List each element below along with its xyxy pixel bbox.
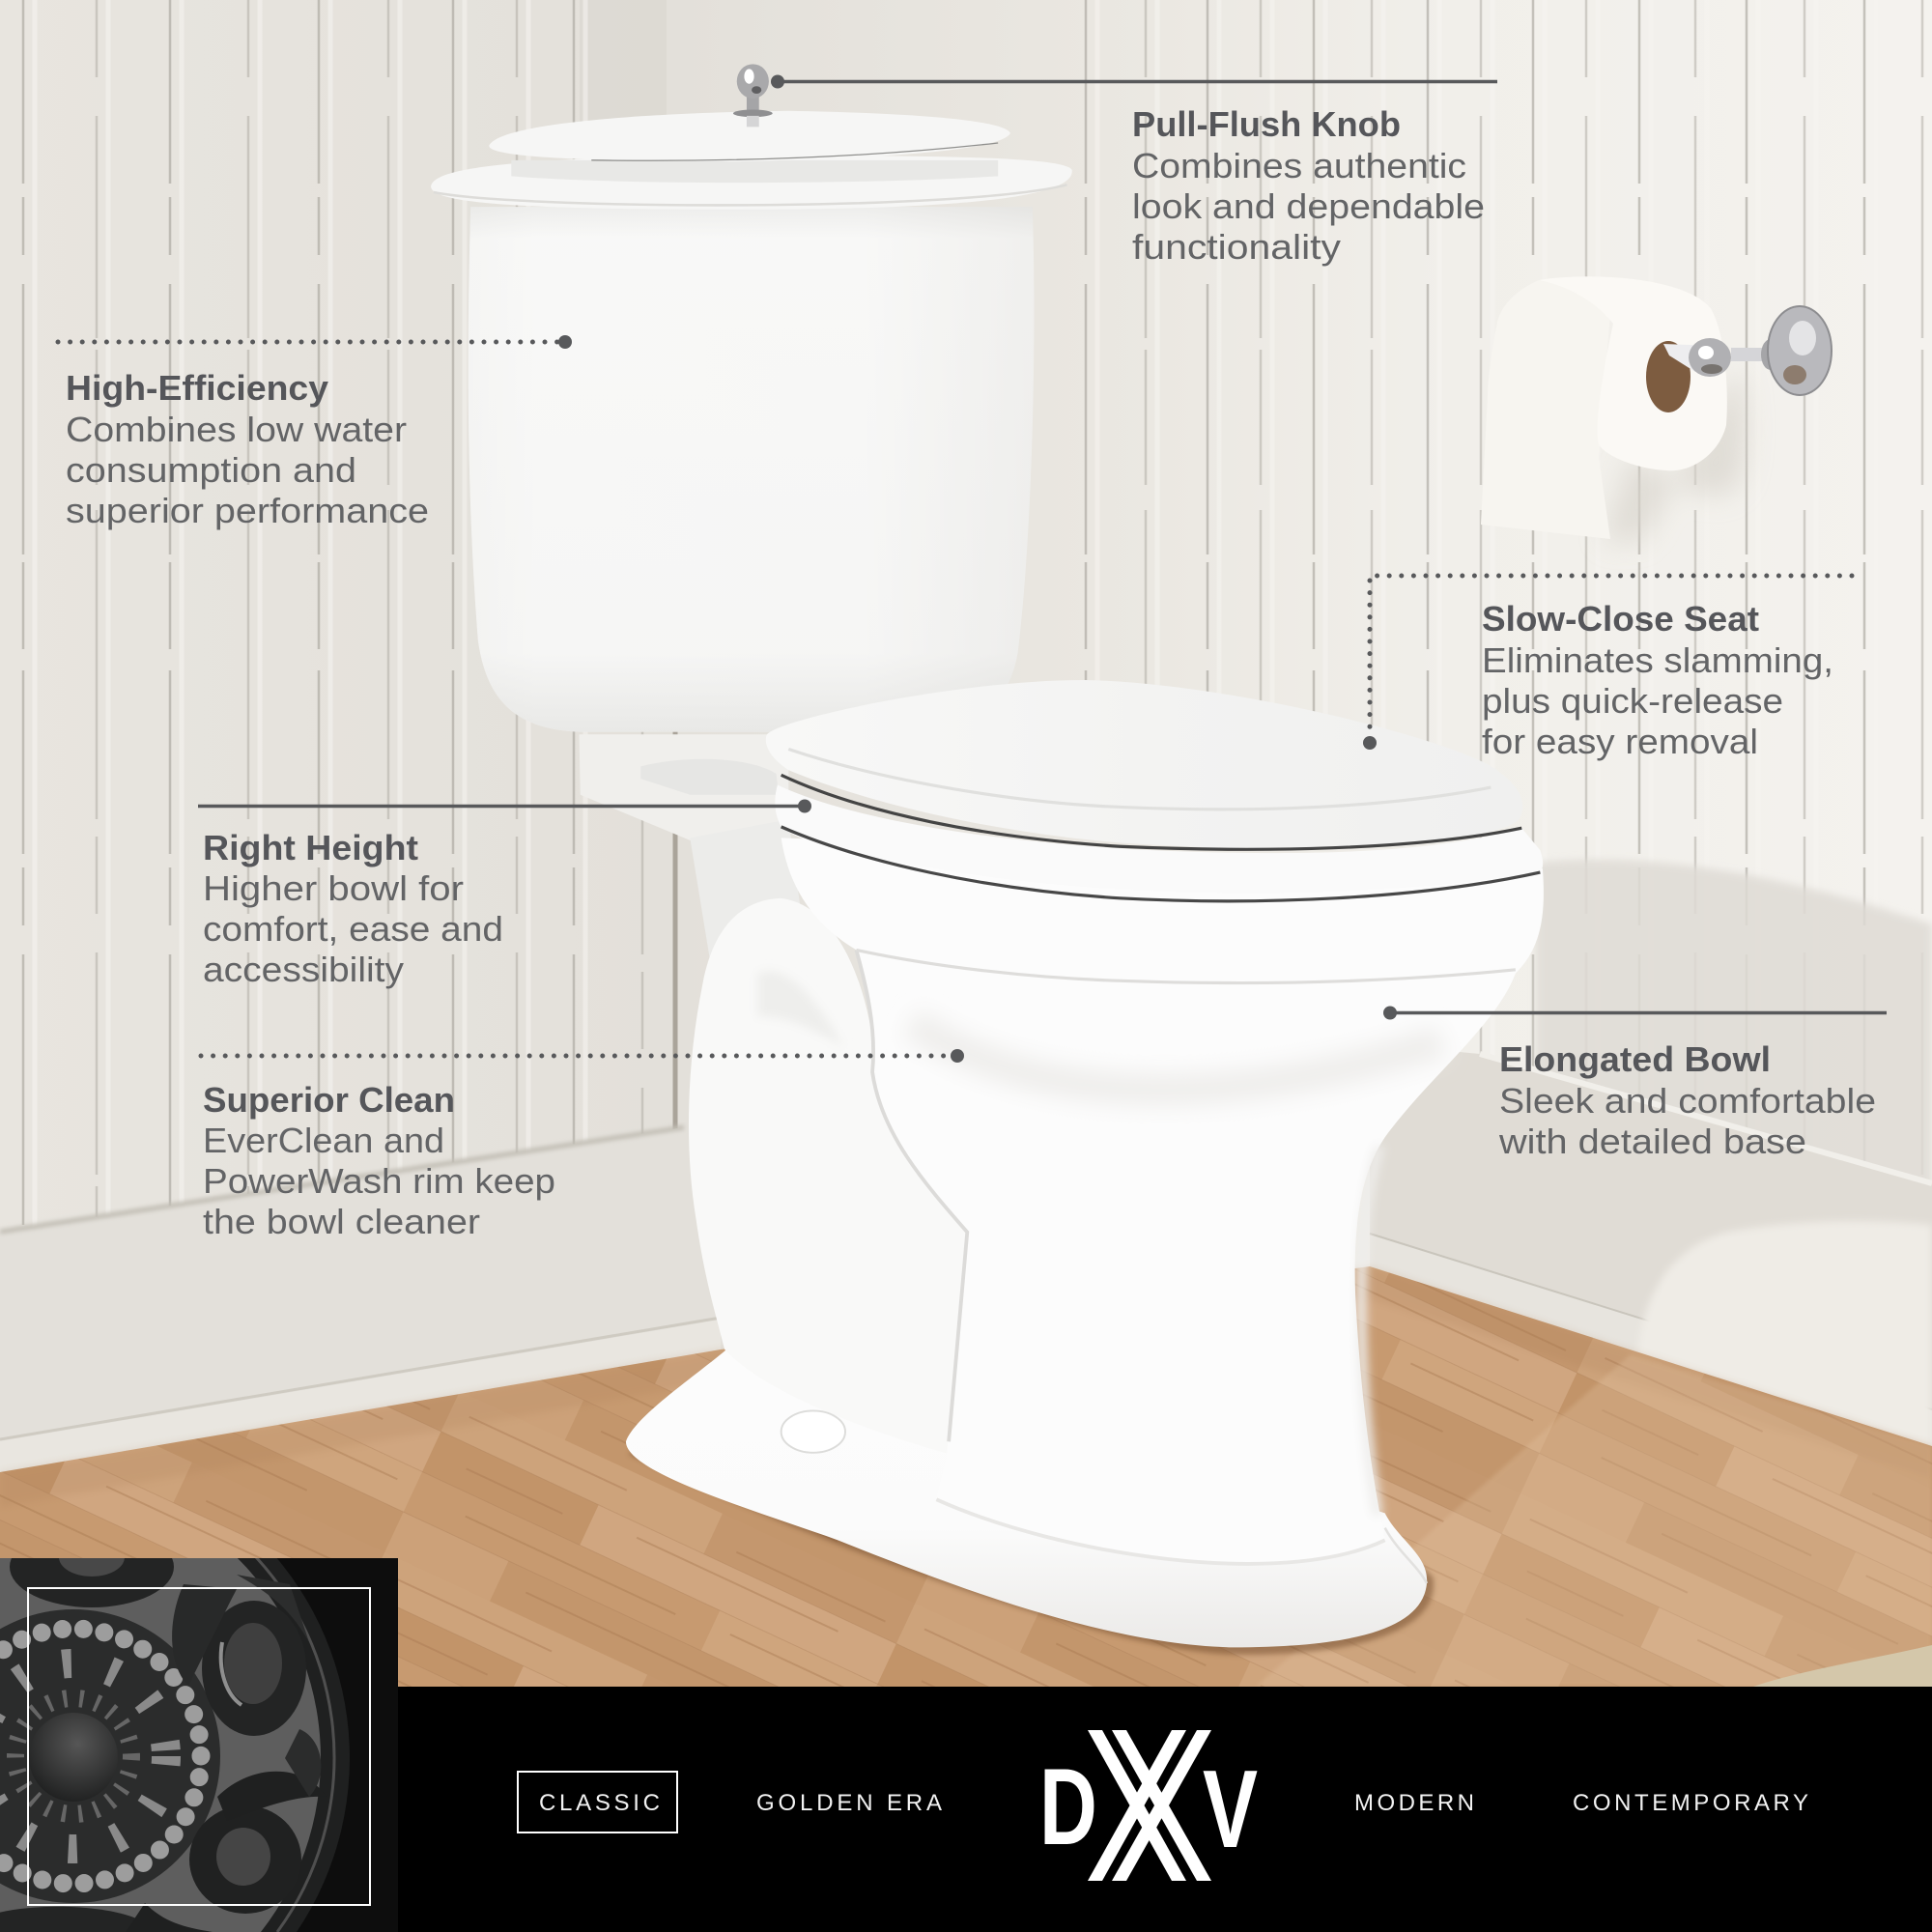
callout: elongated bowl: Sleek and comfortable <box>1499 1081 1876 1121</box>
callout: superior clean: EverClean and <box>203 1121 444 1160</box>
neck <box>579 734 788 840</box>
callout: high-efficiency: superior performance <box>66 491 429 530</box>
callout: superior clean: PowerWash rim keep <box>203 1161 555 1201</box>
roll <box>1539 276 1727 470</box>
callout: right height: Right Height <box>203 828 418 867</box>
style label: classic <box>518 1772 677 1833</box>
pull-flush knob <box>733 64 773 127</box>
callout: superior clean: Superior Clean <box>203 1080 455 1120</box>
bowl base <box>626 1350 1427 1647</box>
footer bar <box>0 1687 1932 1932</box>
callout: slow-close seat: for easy removal <box>1482 722 1758 761</box>
callout: high-efficiency: consumption and <box>66 450 356 490</box>
seat <box>775 784 1543 894</box>
callout: right height: comfort, ease and <box>203 909 503 949</box>
callout: pull-flush knob: Pull-Flush Knob <box>1132 104 1401 144</box>
bowl <box>781 838 1544 1564</box>
beadboard grooves <box>23 0 1922 1256</box>
rug <box>1753 1645 1932 1687</box>
callout: superior clean: the bowl cleaner <box>203 1202 480 1241</box>
callout: high-efficiency <box>58 335 572 530</box>
wall shadow on right <box>1536 860 1932 1256</box>
callout: slow-close seat: Eliminates slamming, <box>1482 640 1833 680</box>
right baseboard <box>1370 1043 1932 1446</box>
tank rim <box>431 156 1072 210</box>
callout: right height: Higher bowl for <box>203 868 464 908</box>
sun patch on baseboard <box>1637 1221 1932 1446</box>
panel: ornamental medallion <box>0 1558 398 1932</box>
tank body <box>469 207 1034 732</box>
left baseboard <box>0 1127 721 1472</box>
bolt cap <box>781 1410 845 1453</box>
callout: elongated bowl: Elongated Bowl <box>1499 1039 1771 1079</box>
roll hole <box>1646 341 1690 412</box>
callout: right height: accessibility <box>203 950 404 989</box>
sunlit floor <box>1256 1354 1932 1687</box>
wall <box>0 0 1932 1507</box>
logo: DXV <box>1039 1730 1258 1881</box>
style label: golden era: GOLDEN ERA <box>756 1790 942 1816</box>
holder <box>1663 344 1715 372</box>
callout: high-efficiency: Combines low water <box>66 410 407 449</box>
callout: pull-flush knob: Combines authentic <box>1132 146 1466 185</box>
trapway <box>689 898 974 1454</box>
logo: DXV: V <box>1203 1748 1258 1871</box>
callout: pull-flush knob: look and dependable <box>1132 186 1485 226</box>
toilet <box>431 64 1544 1655</box>
callout: right height <box>198 800 811 989</box>
callout: high-efficiency: High-Efficiency <box>66 368 328 408</box>
style label: classic: CLASSIC <box>539 1790 660 1816</box>
callout: slow-close seat <box>1363 576 1852 761</box>
callout: slow-close seat: plus quick-release <box>1482 681 1783 721</box>
callout: superior clean <box>201 1049 964 1241</box>
shadow <box>1604 367 1747 541</box>
callout: elongated bowl <box>1383 1007 1887 1161</box>
wood floor <box>0 1266 1932 1739</box>
callout: pull-flush knob <box>771 75 1497 267</box>
style label: modern: MODERN <box>1354 1790 1474 1816</box>
tank lid <box>489 111 1010 161</box>
floor shadow <box>629 1417 1434 1655</box>
style label: contemporary: CONTEMPORARY <box>1573 1790 1808 1816</box>
paper sheet <box>1481 280 1613 539</box>
toilet paper holder <box>1481 276 1832 541</box>
seat lid <box>766 680 1522 849</box>
corner of the room <box>672 705 678 1130</box>
logo: DXV: D <box>1039 1747 1097 1867</box>
callout: pull-flush knob: functionality <box>1132 227 1341 267</box>
callout: slow-close seat: Slow-Close Seat <box>1482 599 1759 639</box>
callout: elongated bowl: with detailed base <box>1498 1122 1806 1161</box>
